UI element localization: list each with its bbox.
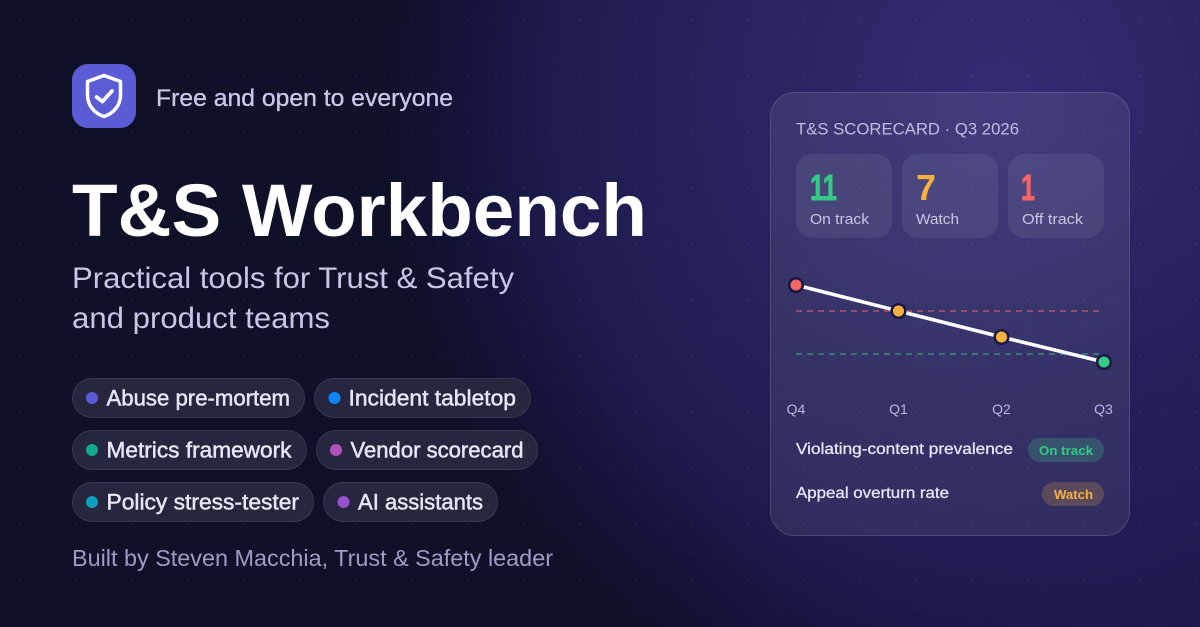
pill: Incident tabletop bbox=[314, 378, 530, 418]
tagline: Free and open to everyone bbox=[156, 85, 453, 112]
pill: Metrics framework: Metrics framework bbox=[106, 438, 293, 462]
line chart: Q3 bbox=[1094, 401, 1113, 417]
panel: scorecard bbox=[770, 92, 1130, 536]
scorecard heading: T&S SCORECARD · Q3 2026 bbox=[796, 120, 1019, 138]
stat: on track: On track bbox=[810, 211, 870, 228]
stat: watch: Watch bbox=[916, 211, 959, 228]
pill: Policy stress-tester: Policy stress-tester bbox=[106, 490, 299, 514]
title: T&S Workbench bbox=[72, 169, 647, 252]
subtitle bbox=[72, 262, 514, 335]
line chart: Q4 bbox=[787, 401, 806, 417]
subtitle: Practical tools for Trust & Safety bbox=[72, 262, 514, 295]
metric row: violating-content prevalence: Violating-content prevalence bbox=[796, 441, 1013, 458]
stat: watch: 7 bbox=[916, 167, 936, 208]
stat: off track: 1 bbox=[1021, 167, 1035, 208]
pill: Abuse pre-mortem bbox=[72, 378, 304, 418]
subtitle: and product teams bbox=[72, 302, 330, 335]
pill: Vendor scorecard: Vendor scorecard bbox=[350, 438, 524, 462]
tool pills bbox=[72, 378, 538, 522]
stat: on track: 11 bbox=[810, 167, 837, 208]
metric row: appeal overturn rate: Appeal overturn rate bbox=[796, 485, 949, 502]
line chart: Q2 bbox=[992, 401, 1011, 417]
pill: Abuse pre-mortem: Abuse pre-mortem bbox=[106, 386, 290, 410]
metric row: appeal overturn rate: Watch bbox=[1054, 487, 1093, 502]
line chart bbox=[787, 278, 1113, 417]
stat: on track bbox=[796, 154, 892, 238]
metric row: violating-content prevalence bbox=[796, 438, 1104, 462]
pill: AI assistants: AI assistants bbox=[358, 490, 483, 514]
pill: AI assistants bbox=[324, 482, 498, 522]
pill: Vendor scorecard bbox=[316, 430, 538, 470]
pill: Metrics framework bbox=[72, 430, 306, 470]
byline: Built by Steven Macchia, Trust & Safety leader bbox=[72, 545, 553, 571]
stat: off track: Off track bbox=[1022, 211, 1084, 228]
pill: Incident tabletop: Incident tabletop bbox=[348, 386, 516, 410]
logo: shield check icon bbox=[72, 64, 136, 128]
pill: Policy stress-tester bbox=[72, 482, 314, 522]
stat: watch bbox=[902, 154, 998, 238]
line chart: Q1 bbox=[889, 401, 908, 417]
metric row: appeal overturn rate bbox=[796, 482, 1104, 506]
metric row: violating-content prevalence: On track bbox=[1039, 443, 1094, 458]
stat: off track bbox=[1008, 154, 1104, 238]
